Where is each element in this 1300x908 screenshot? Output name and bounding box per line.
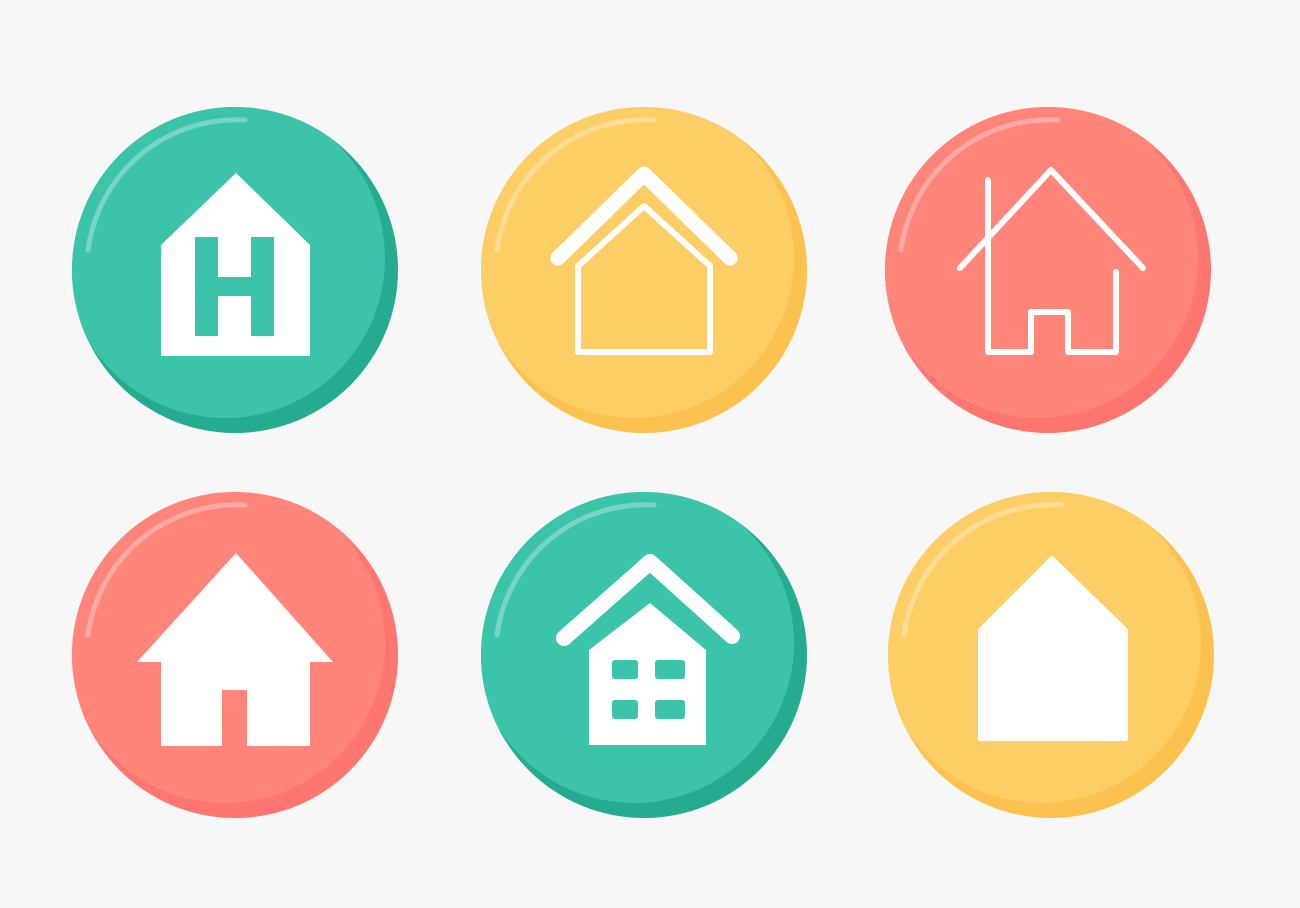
icon: coral line house bbox=[878, 98, 1211, 433]
icon: teal H house bbox=[65, 98, 398, 433]
icon: yellow outline house bbox=[474, 98, 807, 433]
icon: teal house with windows bbox=[474, 483, 807, 818]
icon: yellow pentagon house bbox=[881, 483, 1214, 818]
icon: coral solid house bbox=[65, 483, 398, 818]
